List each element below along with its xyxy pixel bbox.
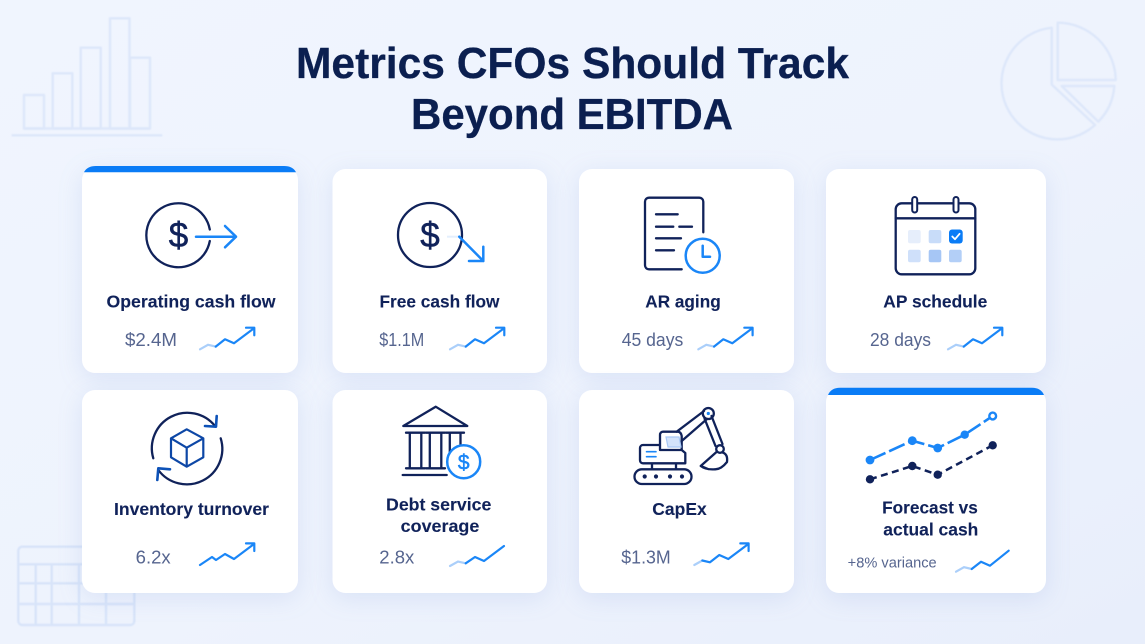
icon: dollar with down arrow: $ bbox=[420, 216, 440, 255]
heading: AR aging bbox=[645, 292, 721, 312]
sparkline bbox=[200, 328, 254, 349]
panel: CapEx bbox=[579, 390, 794, 593]
heading: Operating cash flow bbox=[106, 292, 276, 312]
heading: CapEx bbox=[652, 499, 707, 519]
value: 45 days bbox=[622, 329, 683, 350]
icon: dollar with down arrow bbox=[398, 203, 483, 267]
icon: rotating box bbox=[152, 413, 222, 484]
heading: AP schedule bbox=[883, 292, 988, 312]
icon: calendar bbox=[896, 197, 975, 274]
background icon: table bbox=[18, 547, 134, 625]
panel: AR aging bbox=[579, 169, 794, 373]
panel: forecast vs actual cash bbox=[826, 388, 1046, 593]
icon: dollar with right arrow bbox=[146, 203, 236, 267]
background icon: bar chart bbox=[12, 18, 162, 135]
heading: Forecast vs bbox=[882, 497, 978, 517]
sparkline bbox=[450, 328, 504, 349]
sparkline bbox=[200, 543, 254, 565]
value: 2.8x bbox=[379, 546, 415, 567]
panel: debt service coverage bbox=[332, 390, 547, 593]
sparkline bbox=[450, 546, 504, 566]
value: 28 days bbox=[870, 329, 931, 350]
title: Beyond EBITDA bbox=[411, 90, 733, 139]
icon: dollar with right arrow: $ bbox=[169, 216, 188, 255]
title bbox=[296, 39, 850, 139]
value: $1.1M bbox=[379, 329, 424, 350]
heading: Free cash flow bbox=[380, 292, 500, 312]
icon: excavator bbox=[634, 408, 727, 484]
panel: AP schedule bbox=[826, 169, 1046, 373]
line chart: forecast and actual bbox=[866, 413, 997, 483]
heading: Debt service bbox=[386, 495, 492, 515]
panel: free cash flow bbox=[332, 169, 547, 373]
heading: coverage bbox=[401, 516, 480, 536]
sparkline bbox=[698, 328, 753, 349]
icon: bank with coin bbox=[403, 407, 480, 478]
sparkline bbox=[694, 543, 749, 565]
heading bbox=[386, 495, 492, 536]
icon: bank with coin: $ bbox=[458, 452, 470, 474]
icon: document with clock bbox=[645, 198, 720, 273]
heading bbox=[882, 497, 978, 539]
sparkline bbox=[948, 328, 1002, 349]
heading: actual cash bbox=[883, 519, 978, 539]
sparkline bbox=[956, 551, 1009, 572]
heading: Inventory turnover bbox=[114, 499, 269, 519]
value: $2.4M bbox=[125, 329, 177, 350]
panel: inventory turnover bbox=[82, 390, 298, 593]
panel: operating cash flow bbox=[82, 166, 298, 373]
value: +8% variance bbox=[848, 555, 937, 571]
title: Metrics CFOs Should Track bbox=[296, 39, 850, 88]
value: $1.3M bbox=[621, 546, 671, 567]
value: 6.2x bbox=[136, 546, 171, 567]
background icon: pie chart bbox=[1002, 23, 1116, 139]
